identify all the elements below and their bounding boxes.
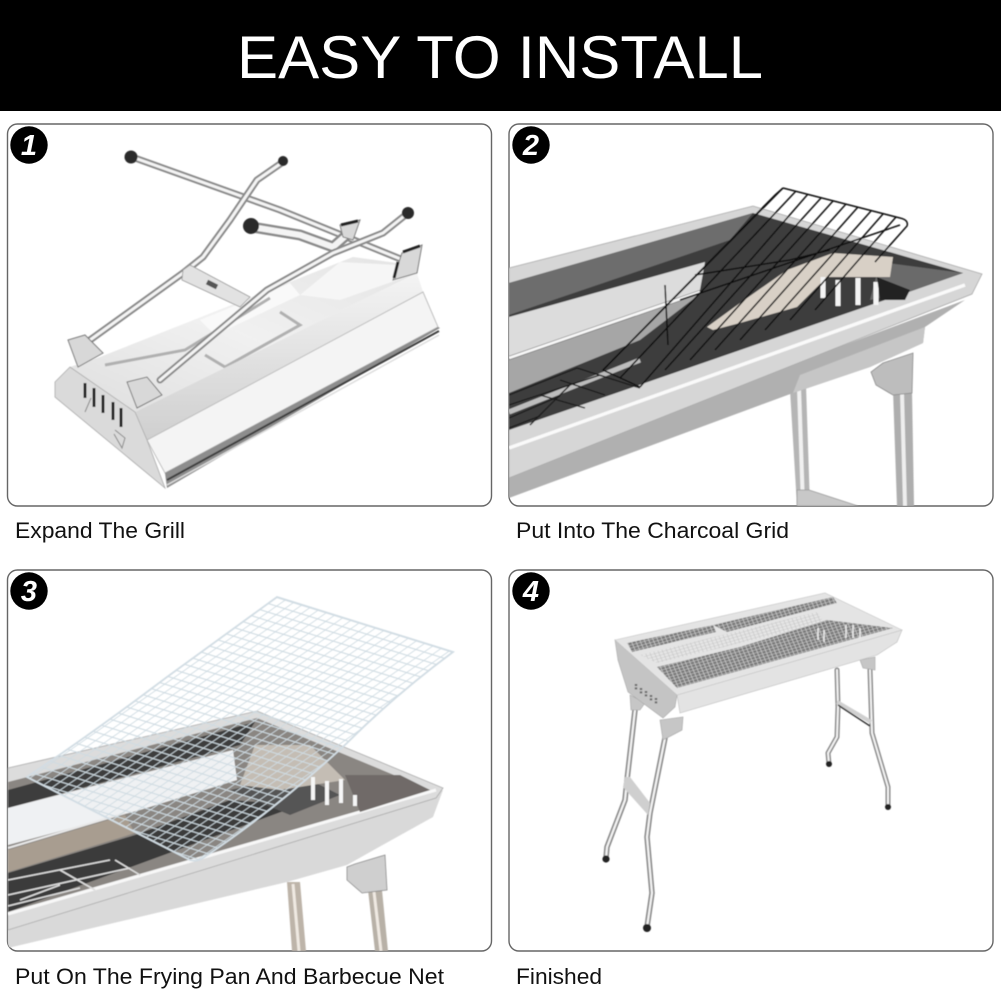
tray top frame <box>615 593 902 695</box>
panel: step 2 put into the charcoal grid <box>509 124 993 506</box>
tray underside <box>509 300 965 498</box>
caption: step 3: Put On The Frying Pan And Barbecue Net <box>15 964 444 989</box>
badge: step 3: 3 <box>21 576 37 608</box>
badge: step 4 <box>512 572 550 610</box>
illustration: tray with charcoal rack <box>509 188 982 506</box>
grill legs <box>790 385 914 506</box>
caption: step 1: Expand The Grill <box>15 518 185 543</box>
illustration: tray with wire net <box>8 597 453 951</box>
leg bracket <box>871 353 913 395</box>
rubber feet caps <box>124 150 414 234</box>
charcoal wire rack <box>603 188 907 387</box>
illustration: folded grill upside down <box>55 150 440 488</box>
tray rim <box>8 711 443 930</box>
tray rim <box>509 206 982 478</box>
barbecue net <box>27 597 453 861</box>
badge: step 1: 1 <box>21 130 37 162</box>
badge: step 4: 4 <box>522 576 539 608</box>
tray end face <box>615 640 677 718</box>
panel: step 1 expand the grill <box>8 124 492 506</box>
illustration: assembled grill <box>602 593 902 932</box>
leg bracket <box>347 855 387 893</box>
end-plate vent slots <box>85 383 121 427</box>
tray interior <box>8 718 430 912</box>
leg brackets <box>630 657 875 740</box>
badge: step 2 <box>512 126 550 164</box>
grill meshes <box>627 597 893 688</box>
leg brackets <box>68 220 422 408</box>
badge: step 3 <box>10 572 48 610</box>
title banner: EASY TO INSTALL <box>237 24 763 91</box>
leg tubes <box>90 157 408 380</box>
lower rack <box>509 368 640 428</box>
badge: step 1 <box>10 126 48 164</box>
rubber feet <box>602 761 891 932</box>
legs <box>606 670 888 927</box>
lower rack <box>8 860 140 906</box>
grill legs <box>287 882 388 951</box>
caption: step 2: Put Into The Charcoal Grid <box>516 518 789 543</box>
caption: step 4: Finished <box>516 964 602 989</box>
tray interior <box>509 213 963 430</box>
tray front face <box>677 630 902 713</box>
panel: step 4 finished <box>509 570 993 951</box>
title banner <box>0 0 1001 111</box>
badge: step 2: 2 <box>522 130 539 162</box>
panel: step 3 put on the frying pan and barbecue net <box>8 570 492 951</box>
tray underside <box>8 790 443 948</box>
